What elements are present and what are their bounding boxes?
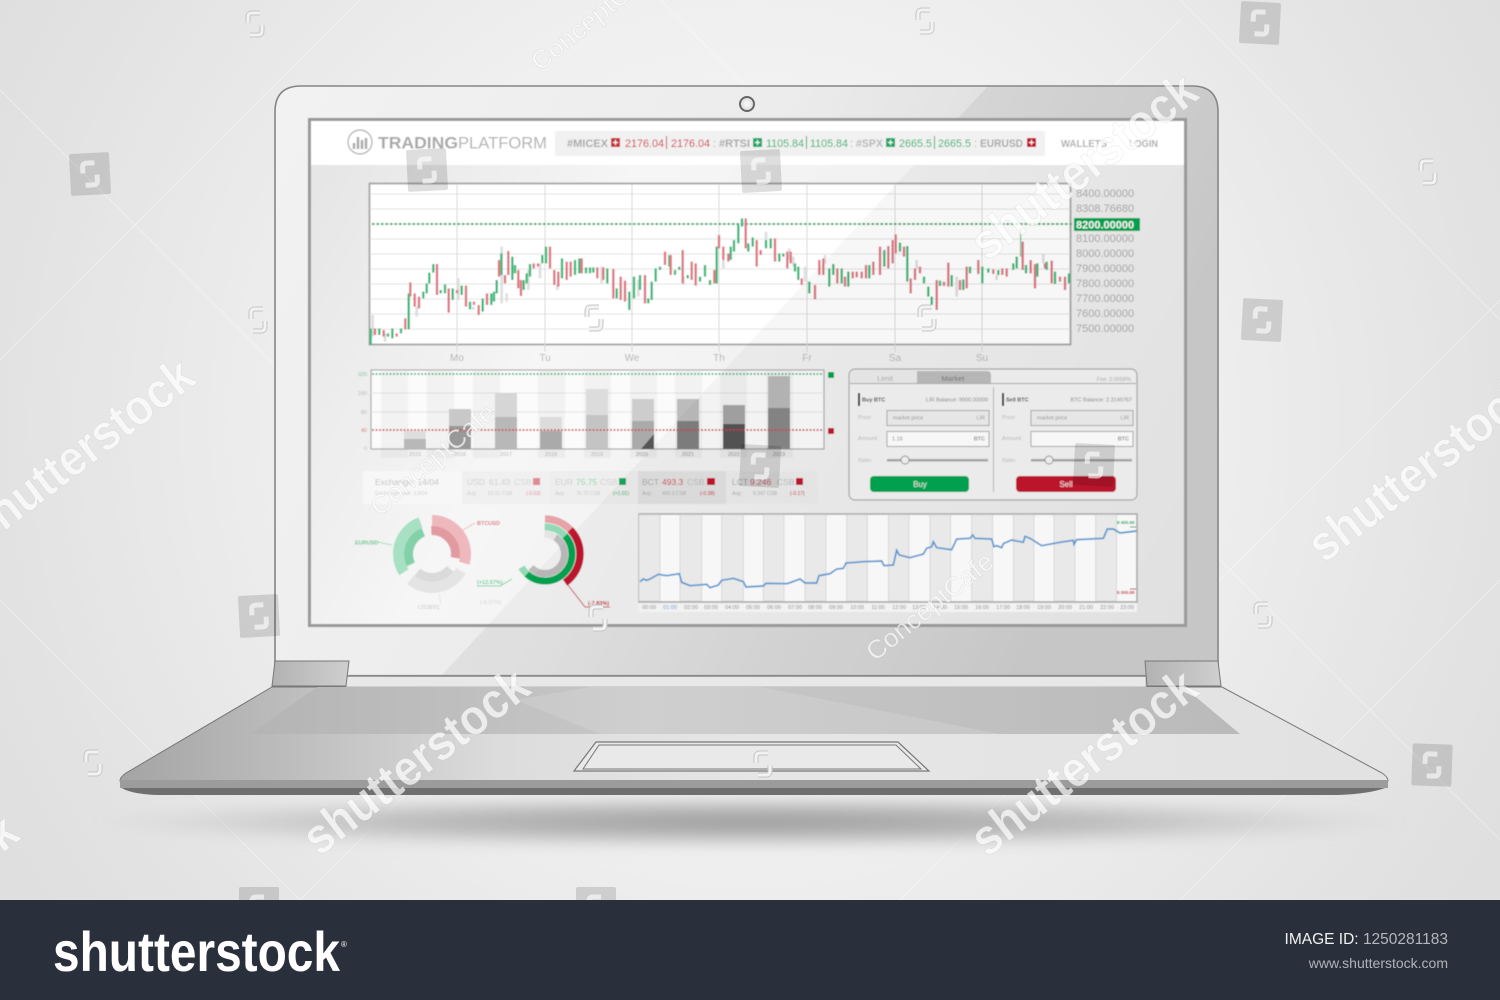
- price axis: 7800.00000: [1076, 278, 1134, 290]
- BCT rate: (-0.38): [700, 491, 715, 497]
- sell column: Ratio:: [1002, 458, 1017, 464]
- bar year axis: 2022: [728, 452, 740, 458]
- ticker: 2176.04: [625, 138, 664, 150]
- base front edge: [120, 780, 1388, 795]
- bar year axis: 2015: [409, 452, 421, 458]
- candlestick chart: [370, 184, 1140, 364]
- exchange rates row: [363, 471, 818, 504]
- sell column: [1002, 393, 1133, 492]
- bar value axis: 0: [364, 446, 367, 452]
- hour axis: 18:00: [1016, 605, 1030, 611]
- bar chart: [358, 370, 834, 458]
- hour axis: 21:00: [1079, 605, 1093, 611]
- bar year axis: 2020: [636, 452, 648, 458]
- hour axis: 22:00: [1100, 605, 1114, 611]
- bar value axis: 80: [361, 410, 367, 416]
- exchange date: Exchange rate: 13/04: [375, 491, 427, 497]
- pale candles right: [766, 232, 1043, 297]
- price axis: 7600.00000: [1076, 308, 1134, 320]
- sell column: Amount:: [1002, 436, 1023, 442]
- radial labels: (-7.83%): [588, 601, 609, 607]
- EUR rate: (+1.01): [613, 491, 629, 497]
- LCT rate: CSB: [777, 477, 795, 487]
- buy column: Buy BTC: [862, 398, 885, 404]
- footer logo: shutterstock: [53, 920, 341, 983]
- buy column: BTC: [974, 436, 985, 442]
- price axis: 8400.00000: [1076, 188, 1134, 200]
- webcam: [740, 97, 754, 111]
- price line: [640, 529, 1137, 588]
- exchange date: [363, 471, 462, 504]
- base top surface: [120, 687, 1388, 781]
- column divider: [992, 387, 994, 492]
- hour axis: 23:00: [1120, 605, 1134, 611]
- sell column: Sell: [1059, 480, 1073, 489]
- BCT rate: 493.3 CSB: [662, 491, 687, 497]
- hour axis: 11:00: [871, 605, 885, 611]
- ticker: [555, 131, 1045, 156]
- BCT rate: BCT: [642, 477, 659, 487]
- EUR rate: [550, 471, 638, 504]
- watermark text: ConceptCafe: [860, 546, 999, 667]
- USD rate: CSB: [514, 477, 532, 487]
- ticker: EURUSD: [980, 138, 1023, 150]
- sell column: market price: [1037, 416, 1067, 422]
- footer bar: [0, 900, 1500, 1000]
- order panel: [849, 369, 1137, 500]
- sell column: Sell BTC: [1006, 398, 1029, 404]
- footer logo: ®: [341, 940, 347, 949]
- hour axis: 10:00: [850, 605, 864, 611]
- tabs: Limit: [877, 374, 894, 383]
- hour axis: 04:00: [725, 605, 739, 611]
- hour bands: [639, 515, 1117, 601]
- radial labels: (+12.57%): [477, 580, 503, 586]
- screen frame: [310, 120, 1186, 626]
- logo: PLATFORM: [458, 134, 547, 152]
- hour axis: 20:00: [1058, 605, 1072, 611]
- tabs: [850, 370, 1136, 384]
- limit lines: [372, 373, 824, 375]
- bars: [404, 376, 790, 449]
- hour axis: 14:00: [933, 605, 947, 611]
- limit markers: [828, 372, 834, 378]
- hour axis: 08:00: [808, 605, 822, 611]
- donut pair labels: EURUSD: [355, 540, 378, 546]
- day axis: We: [625, 353, 640, 364]
- pale candles left: [373, 247, 723, 342]
- hour axis: 15:00: [954, 605, 968, 611]
- LCT rate: 9.347 CSB: [753, 491, 778, 497]
- buy column: Buy: [913, 480, 927, 489]
- BCT rate: CSB: [687, 477, 705, 487]
- hour axis: 00:00: [642, 605, 656, 611]
- donut pair labels: BTCUSD: [477, 521, 500, 527]
- ticker: #RTSI: [719, 138, 750, 150]
- ticker: 2176.04: [671, 138, 710, 150]
- USD rate: 62.01 CSB: [488, 491, 513, 497]
- hour axis: 16:00: [975, 605, 989, 611]
- BCT rate: [638, 471, 726, 504]
- ticker: #MICEX: [567, 138, 609, 150]
- price axis: 8100.00000: [1076, 233, 1134, 245]
- hour axis: 19:00: [1037, 605, 1051, 611]
- hour axis: 13:00: [912, 605, 926, 611]
- bar year axis: 2016: [454, 452, 466, 458]
- price axis: 7900.00000: [1076, 263, 1134, 275]
- buy column: LIR Balance: 9000.00000: [926, 398, 988, 404]
- right hinge: [1145, 661, 1221, 686]
- LCT rate: 9.246: [750, 477, 772, 487]
- keyboard reflection: [515, 687, 1000, 734]
- bar year axis: [409, 452, 785, 458]
- hour axis: 02:00: [684, 605, 698, 611]
- hour axis: 12:00: [892, 605, 906, 611]
- day axis: Th: [713, 353, 725, 364]
- radial progress chart: [477, 519, 610, 607]
- high and low markers: [1117, 520, 1136, 595]
- price axis: 8000.00000: [1076, 248, 1134, 260]
- buy column: market price: [893, 416, 923, 422]
- EUR rate: EUR: [555, 477, 573, 487]
- donut pair labels: [355, 521, 500, 611]
- sell column: BTC Balance: 2.3149767: [1071, 398, 1132, 404]
- radial labels: [477, 579, 610, 607]
- price target dotted line: [372, 223, 1072, 225]
- logo: [348, 130, 547, 154]
- touchpad: [574, 742, 929, 771]
- nav links: LOGIN: [1129, 138, 1158, 150]
- bar year axis: 2018: [545, 452, 557, 458]
- sell column: LIR: [1120, 416, 1129, 422]
- USD rate: 61.43: [489, 477, 511, 487]
- tabs: Fee: 0.0058%: [1097, 377, 1131, 383]
- buy column: [858, 393, 989, 492]
- buy column: Amount:: [858, 436, 879, 442]
- lid reflection: [442, 87, 1217, 675]
- lid lower line: [349, 674, 1145, 676]
- LCT rate: Avg.:: [732, 491, 743, 497]
- ticker: 1105.84: [766, 138, 804, 150]
- hinge strip: [346, 675, 1146, 687]
- watermark text: shutterstock: [960, 658, 1208, 867]
- BCT rate: 493.3: [662, 477, 684, 487]
- EUR rate: 76.75 CSB: [576, 491, 601, 497]
- EUR rate: 75.75: [576, 477, 598, 487]
- watermark text: shutterstock: [960, 62, 1208, 271]
- bar value axis: 320: [358, 372, 367, 378]
- LCT rate: [726, 471, 818, 504]
- bar year axis: 2019: [591, 452, 603, 458]
- laptop shadow: [95, 796, 1405, 848]
- day axis: Mo: [450, 353, 464, 364]
- tabs: Market: [942, 374, 965, 383]
- radial labels: (-0.37%): [480, 600, 501, 606]
- USD rate: Avg.:: [467, 491, 478, 497]
- buy column: Ratio:: [858, 458, 873, 464]
- hour axis: 05:00: [746, 605, 760, 611]
- line chart: [639, 514, 1137, 612]
- BCT rate: Avg.:: [642, 491, 653, 497]
- laptop lid: [275, 86, 1218, 676]
- ticker: :: [713, 138, 716, 150]
- ticker: #SPX: [856, 138, 884, 150]
- day axis: Su: [976, 353, 988, 364]
- hour axis: 01:00: [663, 605, 677, 611]
- USD rate: (-0.63): [526, 491, 541, 497]
- image id: IMAGE ID: 1250281183: [1285, 931, 1448, 948]
- ticker: 2665.5: [899, 138, 932, 150]
- LCT rate: (-0.17): [790, 491, 805, 497]
- candles right: [753, 228, 1069, 310]
- price axis: 8308.76680: [1076, 203, 1134, 215]
- donut pair labels: LTCBTC: [418, 605, 440, 611]
- hour axis: 17:00: [996, 605, 1010, 611]
- exchange date: Exchange: 14/04: [375, 477, 439, 487]
- price axis: [1076, 188, 1134, 335]
- bar value axis: 160: [358, 391, 367, 397]
- bar backgrounds: [381, 371, 793, 458]
- header bar: [311, 121, 1184, 165]
- website: www.shutterstock.com: [1308, 955, 1448, 971]
- bar year axis: 2017: [500, 452, 512, 458]
- day axis: Sa: [889, 353, 902, 364]
- LCT rate: LCT: [732, 477, 748, 487]
- hour axis: 06:00: [767, 605, 781, 611]
- ticker: :: [850, 138, 853, 150]
- price axis: 7500.00000: [1076, 323, 1134, 335]
- high and low markers: 9 400.00: [1117, 520, 1135, 525]
- current price tag: 8200.00000: [1076, 220, 1134, 232]
- screen reflection overlay: [488, 165, 1184, 625]
- bar value axis: 40: [361, 428, 367, 434]
- base front highlight: [120, 780, 1388, 788]
- day axis: Tu: [539, 353, 551, 364]
- laptop base: [120, 675, 1388, 795]
- left hinge: [272, 661, 349, 686]
- watermark text: ConceptCafe: [364, 397, 501, 522]
- ticker: 1105.84: [810, 138, 848, 150]
- sell column: Price:: [1002, 415, 1017, 421]
- day axis: Fr: [802, 353, 812, 364]
- price axis: 7700.00000: [1076, 293, 1134, 305]
- EUR rate: CSB: [600, 477, 618, 487]
- day axis: [450, 353, 988, 364]
- buy column: LIR: [976, 416, 985, 422]
- hour axis: 09:00: [829, 605, 843, 611]
- nav links: WALLETS: [1061, 138, 1107, 150]
- USD rate: [462, 471, 550, 504]
- sell column: BTC: [1118, 436, 1129, 442]
- buy column: 1.16: [892, 436, 903, 442]
- keyboard area: [250, 687, 1240, 734]
- screen: [310, 120, 1186, 626]
- buy column: Price:: [858, 415, 873, 421]
- nav links: [1061, 138, 1158, 150]
- watermark text: shutterstock: [292, 657, 540, 866]
- laptop: [120, 86, 1388, 795]
- ticker: :: [974, 138, 977, 150]
- donut chart: currency pairs: [355, 520, 500, 611]
- hour axis: 03:00: [704, 605, 718, 611]
- logo: TRADING: [378, 134, 458, 152]
- USD rate: USD: [467, 477, 485, 487]
- high and low markers: 5 000.00: [1117, 590, 1135, 595]
- candles left: [371, 218, 748, 345]
- ticker: 2665.5: [938, 138, 971, 150]
- bar value axis: [358, 372, 367, 452]
- bar year axis: 2021: [682, 452, 694, 458]
- hour axis: 07:00: [788, 605, 802, 611]
- hour axis: [639, 603, 1137, 612]
- EUR rate: Avg.:: [555, 491, 566, 497]
- bar year axis: 2023: [773, 452, 785, 458]
